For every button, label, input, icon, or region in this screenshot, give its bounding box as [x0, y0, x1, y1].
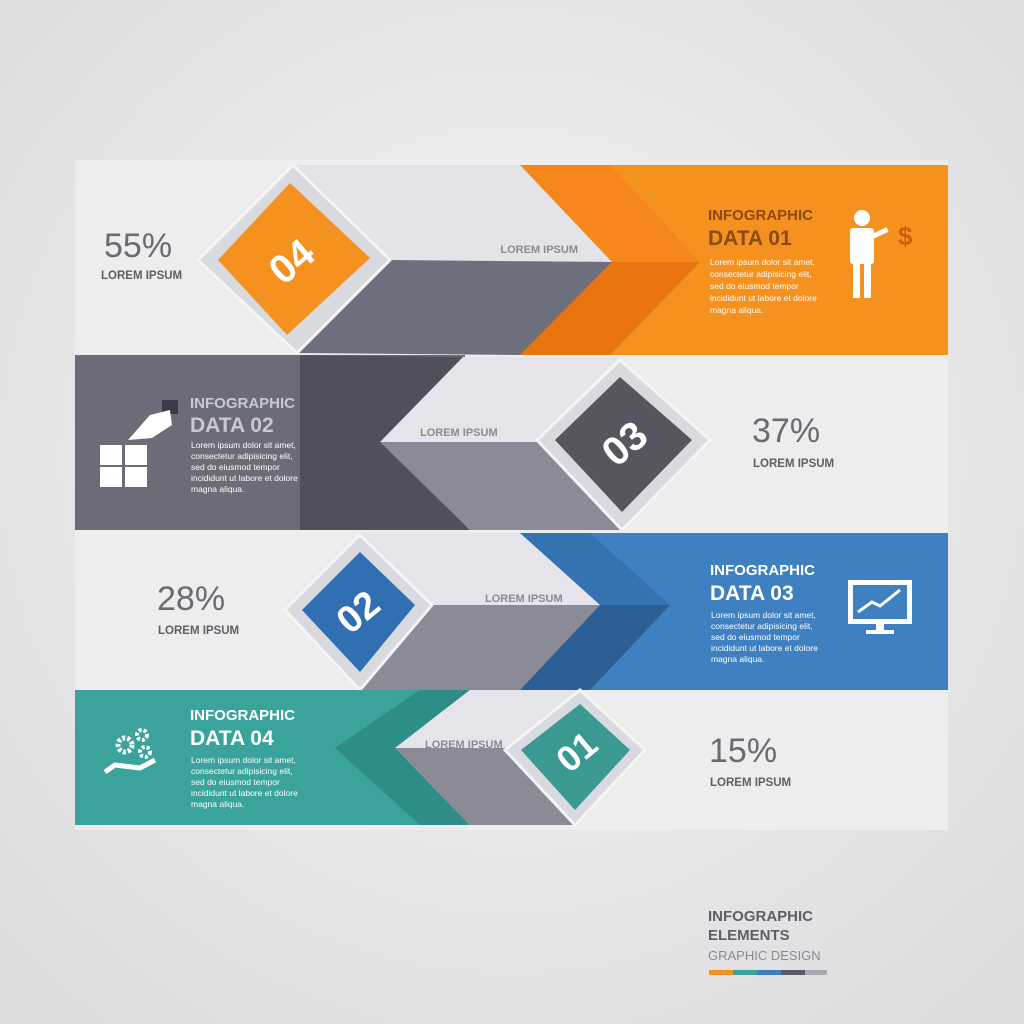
text: data 04: incididunt ut labore et dolore	[191, 788, 298, 798]
percent 28: 28%	[157, 580, 225, 618]
row 3: blue band with block 02	[285, 533, 948, 690]
text: data 02: consectetur adipisicing elit,	[191, 451, 293, 461]
badge 01	[505, 690, 645, 825]
icon: monitor chart	[848, 580, 912, 634]
label: lorem ipsum on block: LOREM IPSUM	[425, 739, 503, 751]
text: data 04: DATA 04	[190, 727, 274, 750]
percent 37: LOREM IPSUM	[753, 458, 834, 470]
percent 55: 55%	[104, 227, 172, 265]
text: data 01: consectetur adipisicing elit,	[710, 269, 812, 279]
legend: infographic elements	[708, 908, 827, 975]
text: data 02	[190, 395, 298, 494]
text: data 03: INFOGRAPHIC	[710, 562, 815, 579]
legend: infographic elements: INFOGRAPHIC	[708, 908, 813, 925]
badge 04	[198, 165, 390, 353]
text: data 03: Lorem ipsum dolor sit amet,	[711, 610, 816, 620]
text: data 03: DATA 03	[710, 582, 794, 605]
text: data 02: DATA 02	[190, 414, 274, 437]
text: data 02: incididunt ut labore et dolore	[191, 473, 298, 483]
percent 15: LOREM IPSUM	[710, 777, 791, 789]
text: data 01: incididunt ut labore et dolore	[710, 293, 817, 303]
icon: businessman with dollar	[850, 210, 913, 298]
text: data 04: Lorem ipsum dolor sit amet,	[191, 755, 296, 765]
icon: gears on hand	[105, 730, 155, 772]
badge 02: 02	[329, 583, 388, 642]
percent 37: 37%	[752, 412, 820, 450]
text: data 01: Lorem ipsum dolor sit amet,	[710, 257, 815, 267]
text: data 04: sed do eiusmod tempor	[191, 777, 280, 787]
icon: hand with puzzle	[100, 400, 178, 487]
legend: infographic elements: ELEMENTS	[708, 927, 790, 944]
percent 55: LOREM IPSUM	[101, 270, 182, 282]
text: data 04: magna aliqua.	[191, 799, 244, 809]
text: data 01	[708, 207, 817, 315]
text: data 03	[710, 562, 818, 664]
badge 03	[537, 360, 710, 530]
text: data 02: Lorem ipsum dolor sit amet,	[191, 440, 296, 450]
text: data 02: sed do eiusmod tempor	[191, 462, 280, 472]
text: data 03: consectetur adipisicing elit,	[711, 621, 813, 631]
percent 28: LOREM IPSUM	[158, 625, 239, 637]
text: data 03: sed do eiusmod tempor	[711, 632, 800, 642]
percent 28	[157, 580, 239, 637]
badge 04: 04	[261, 230, 324, 293]
percent 55	[101, 227, 182, 282]
label: lorem ipsum on block: LOREM IPSUM	[485, 593, 563, 605]
percent 37	[752, 412, 834, 470]
text: data 01: sed do eiusmod tempor	[710, 281, 799, 291]
badge 03: 03	[594, 413, 656, 475]
row 2: gray band with block 03	[75, 355, 710, 530]
badge 02	[285, 535, 432, 690]
legend: infographic elements: GRAPHIC DESIGN	[708, 948, 821, 963]
text: data 01: DATA 01	[708, 227, 792, 250]
text: data 03: incididunt ut labore et dolore	[711, 643, 818, 653]
text: data 01: magna aliqua.	[710, 305, 763, 315]
text: data 04: INFOGRAPHIC	[190, 707, 295, 724]
badge 01: 01	[548, 723, 605, 780]
text: data 04	[190, 707, 298, 809]
label: lorem ipsum on block: LOREM IPSUM	[420, 427, 498, 439]
icon: businessman with dollar: $	[898, 221, 913, 251]
row 1: orange band with block 04	[198, 165, 948, 355]
percent 15: 15%	[709, 732, 777, 770]
percent 15	[709, 732, 791, 789]
text: data 02: INFOGRAPHIC	[190, 395, 295, 412]
text: data 04: consectetur adipisicing elit,	[191, 766, 293, 776]
text: data 02: magna aliqua.	[191, 484, 244, 494]
text: data 01: INFOGRAPHIC	[708, 207, 813, 224]
label: lorem ipsum on block: LOREM IPSUM	[500, 244, 578, 256]
text: data 03: magna aliqua.	[711, 654, 764, 664]
row 4: teal band with block 01	[75, 690, 645, 825]
